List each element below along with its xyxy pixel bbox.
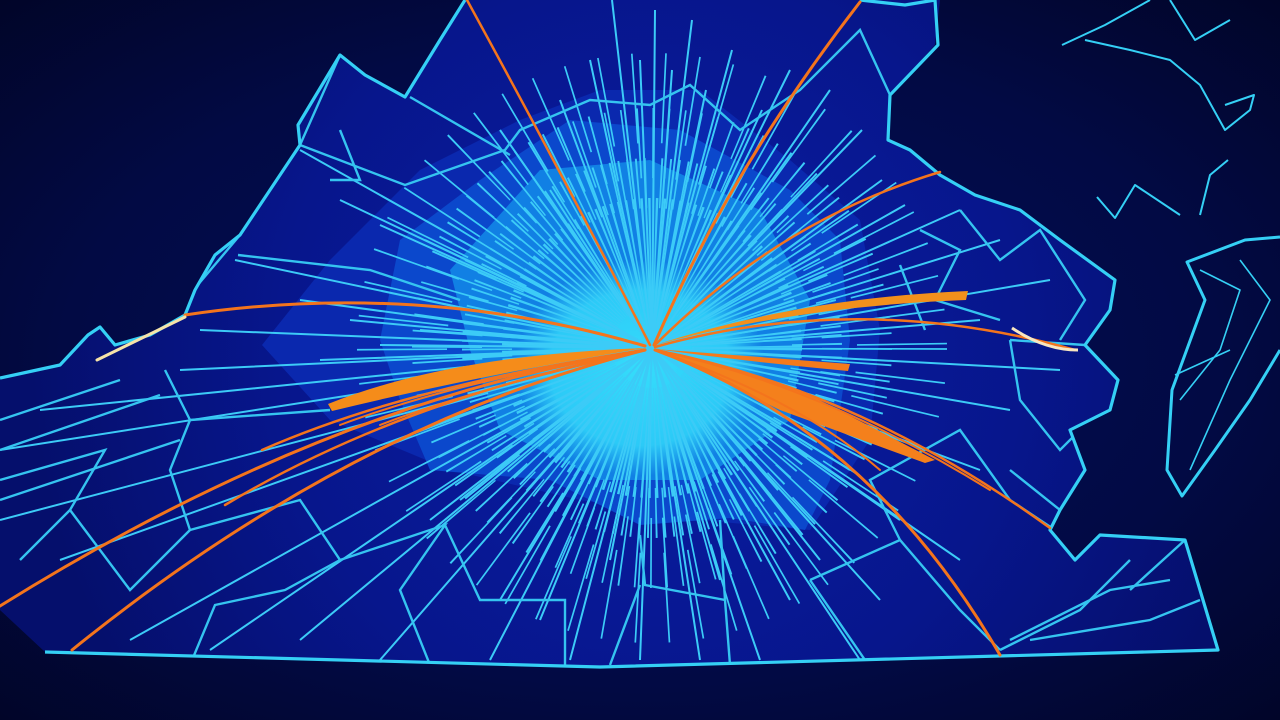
map: eastern shore [1167,237,1280,496]
map: northern coast fragments [1062,0,1254,218]
orange flow arcs [0,0,1075,655]
glow: light blue zone [450,160,810,480]
glow: cyan core [515,260,765,476]
arcs to the east [655,291,1075,371]
glow: dark blue zone [262,90,880,530]
arcs to the southwest [0,350,645,650]
arcs to the southeast [655,348,1050,655]
radial spokes [0,0,1060,660]
glow: mid blue zone [380,120,850,530]
arcs to the north [467,0,940,345]
arcs to the west [97,303,645,505]
highlight: harbor [1012,328,1078,350]
